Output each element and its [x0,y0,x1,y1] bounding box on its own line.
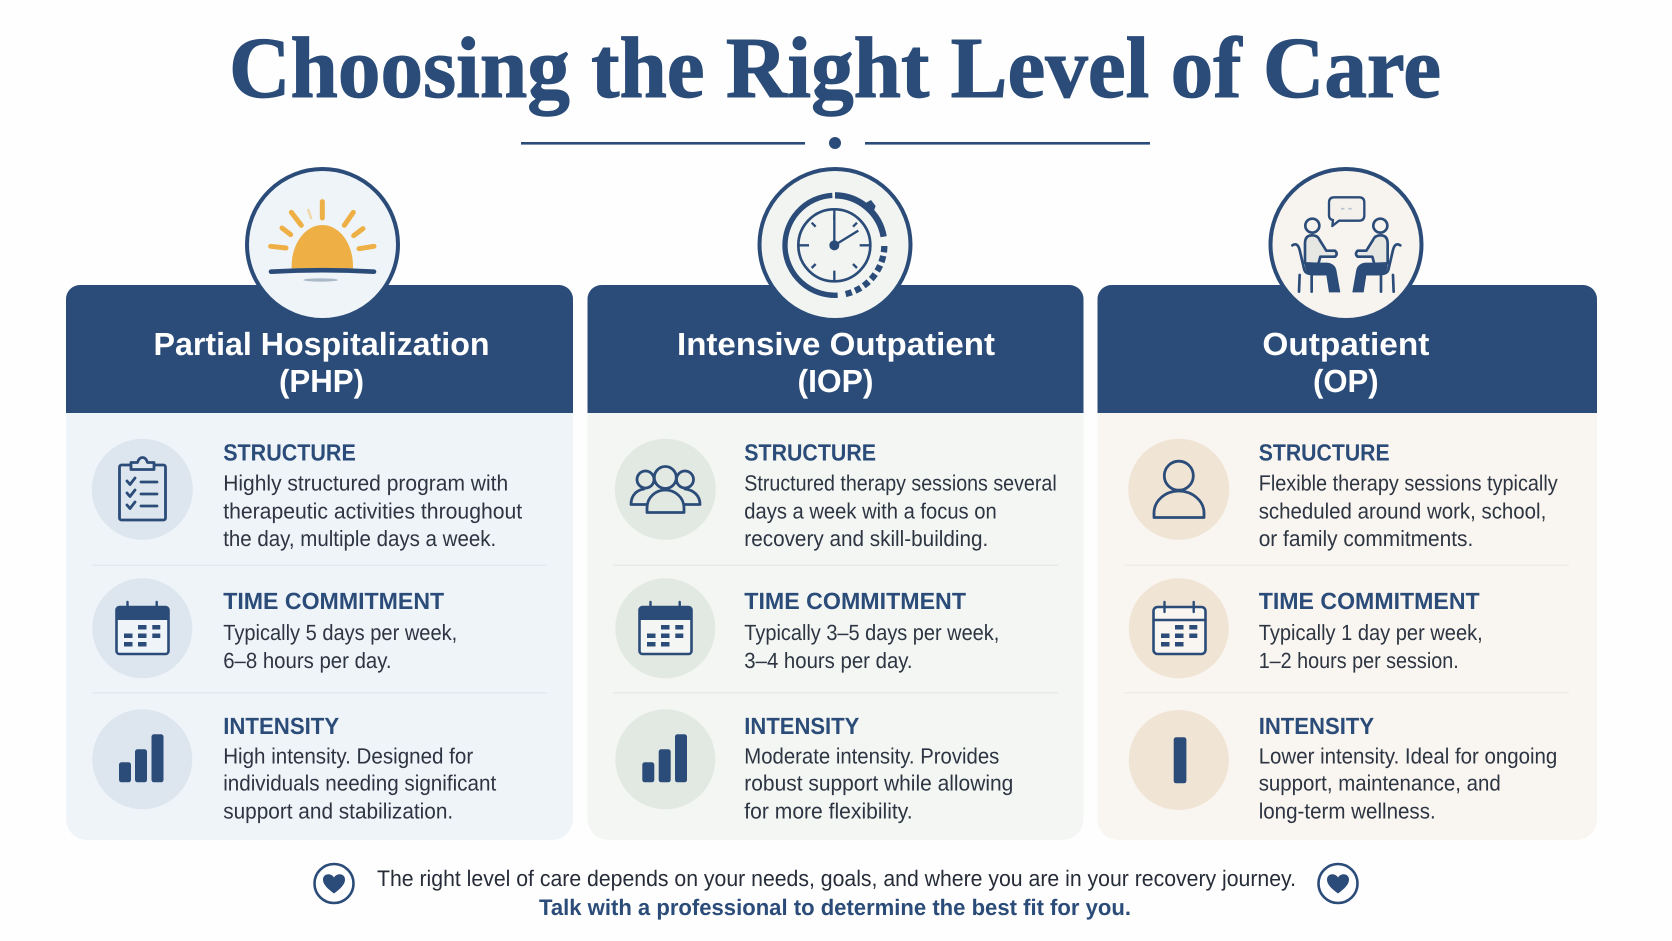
row: intensity [92,709,496,823]
panel header: (PHP) [279,363,364,399]
icon: heart left [314,864,354,903]
icon: calendar outline [1129,578,1229,678]
text: intensity [223,713,496,823]
row: time commitment [615,578,999,678]
text: time commitment: Typically 5 days per week, [223,620,457,645]
text: intensity [1259,713,1557,823]
icon: heart right [1318,864,1358,903]
text: structure: STRUCTURE [223,440,356,466]
text: structure: STRUCTURE [1259,440,1390,466]
icon: clock [760,169,910,320]
panel: intensive outpatient [588,169,1084,840]
text: structure: STRUCTURE [744,440,876,466]
panel header: Outpatient [1262,326,1430,362]
text: time commitment: Typically 1 day per week, [1259,620,1483,645]
row: time commitment [1129,578,1483,678]
text: structure: days a week with a focus on [744,498,997,524]
footer text: The right level of care depends on your needs, goals, and where you are in your recovery journey. [377,866,1296,891]
text: structure: or family commitments. [1259,526,1473,551]
panel header: Intensive Outpatient [677,326,995,362]
text: time commitment [744,588,999,673]
panel body [588,410,1084,840]
panel: outpatient [1098,169,1597,840]
text: intensity: support, maintenance, and [1259,771,1501,796]
text: intensity: INTENSITY [223,713,340,739]
text: intensity: support and stabilization. [223,798,453,823]
icon: sunrise [247,169,398,320]
panel header: Partial Hospitalization [154,326,490,362]
text: intensity: INTENSITY [744,713,860,739]
text: structure: the day, multiple days a week. [223,526,496,551]
text: structure: Highly structured program with [223,471,508,496]
text: time commitment: 6–8 hours per day. [223,648,392,673]
panel header [66,285,573,413]
panel header [588,285,1084,413]
text: time commitment [223,588,457,673]
icon: two people talking [1270,169,1422,320]
icon: calendar [615,578,715,678]
text: structure [744,440,1057,551]
footer text: Talk with a professional to determine the best fit for you. [539,895,1131,920]
icon: three bars [615,709,715,809]
text: time commitment: 1–2 hours per session. [1259,648,1459,673]
icon: clipboard checklist [92,439,193,540]
row: time commitment [92,578,457,678]
text: structure: Structured therapy sessions several [744,471,1057,496]
text: structure: scheduled around work, school, [1259,498,1546,524]
text: structure: Flexible therapy sessions typically [1259,471,1558,496]
text: structure [223,440,522,551]
text: intensity [744,713,1013,823]
icon: single bar [1129,710,1229,810]
text: time commitment: TIME COMMITMENT [744,588,967,614]
text: intensity: Lower intensity. Ideal for ongoing [1259,743,1557,768]
text: time commitment: Typically 3–5 days per week, [744,620,999,645]
footer [314,864,1358,920]
icon: person [1128,439,1229,540]
text: intensity: individuals needing significant [223,771,496,796]
text: time commitment: 3–4 hours per day. [744,648,913,673]
title divider [521,137,1150,149]
panel body [1098,410,1597,840]
panel: partial hospitalization [66,169,573,840]
text: time commitment: TIME COMMITMENT [223,588,445,614]
row: structure [615,439,1057,551]
text: structure [1259,440,1558,551]
text: time commitment [1259,588,1483,673]
row: structure [92,439,522,551]
panel header: (IOP) [798,363,874,399]
text: structure: therapeutic activities throughout [223,498,522,524]
row: intensity [1129,710,1557,823]
text: structure: recovery and skill-building. [744,526,988,551]
panel body [66,410,573,840]
text: intensity: robust support while allowing [744,771,1013,796]
footer text [377,866,1296,920]
text: intensity: Moderate intensity. Provides [744,743,999,768]
panel header: (OP) [1313,363,1379,399]
text: intensity: for more flexibility. [744,798,913,823]
row: intensity [615,709,1013,823]
text: time commitment: TIME COMMITMENT [1259,588,1480,614]
text: intensity: High intensity. Designed for [223,743,473,768]
text: intensity: long-term wellness. [1259,798,1436,823]
text: intensity: INTENSITY [1259,713,1374,739]
icon: three bars [92,709,192,809]
icon: group of people [615,439,716,540]
row: structure [1128,439,1558,551]
title: Choosing the Right Level of Care [229,19,1441,117]
icon: calendar [92,578,192,678]
panel header [1098,285,1597,413]
